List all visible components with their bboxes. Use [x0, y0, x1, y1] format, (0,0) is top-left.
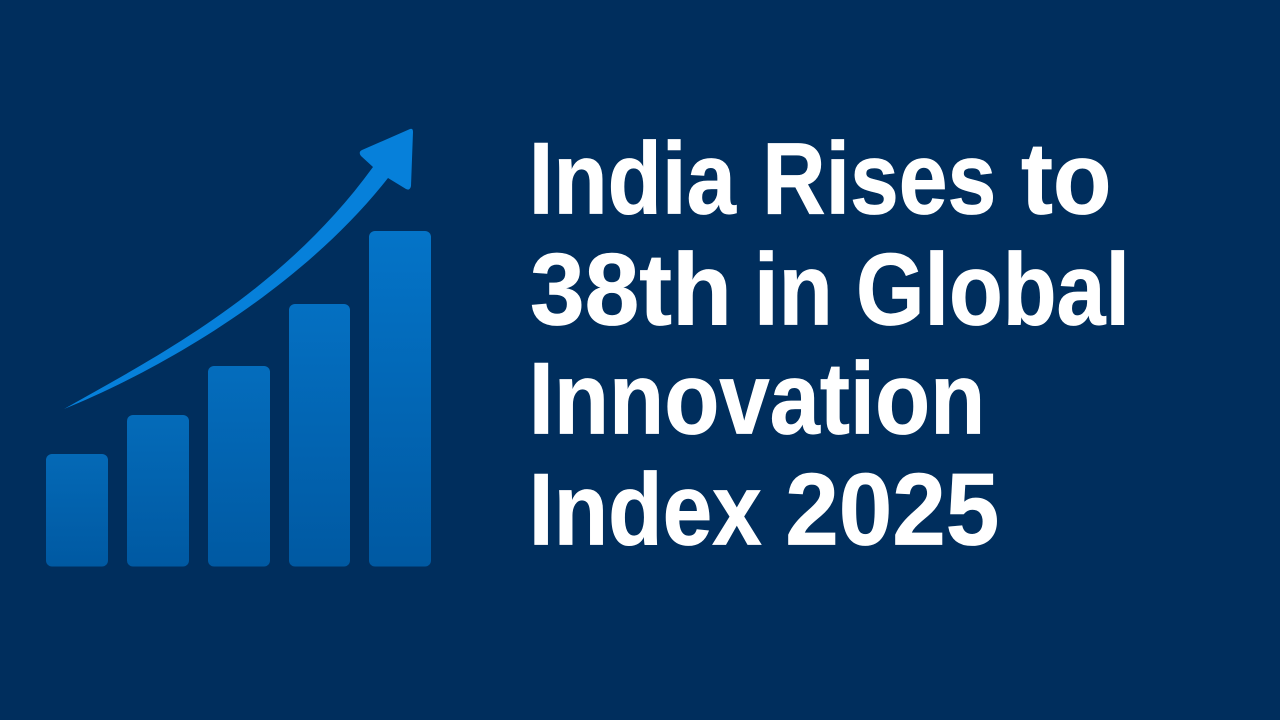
arrow: upward growth curve: [64, 129, 413, 409]
title line 1: India: [529, 121, 737, 236]
title line 1: to: [1021, 121, 1112, 236]
title line 1: Rises: [762, 121, 996, 236]
bar 4: [289, 304, 350, 566]
title line 2: Global: [856, 232, 1130, 347]
title: [529, 121, 1130, 567]
bar 5: [369, 231, 431, 566]
title line 1: [529, 121, 1112, 236]
title line 2: in: [754, 232, 833, 347]
title line 4: 2025: [785, 452, 999, 567]
bar chart: [46, 231, 431, 566]
title line 4: [529, 452, 999, 567]
bar 2: [127, 415, 189, 566]
bar 3: [208, 366, 270, 566]
title line 2: [530, 232, 1130, 347]
title line 3: Innovation: [529, 341, 985, 456]
bar 1: [46, 454, 108, 566]
title line 4: Index: [529, 452, 762, 567]
title line 2: 38th: [530, 232, 732, 347]
